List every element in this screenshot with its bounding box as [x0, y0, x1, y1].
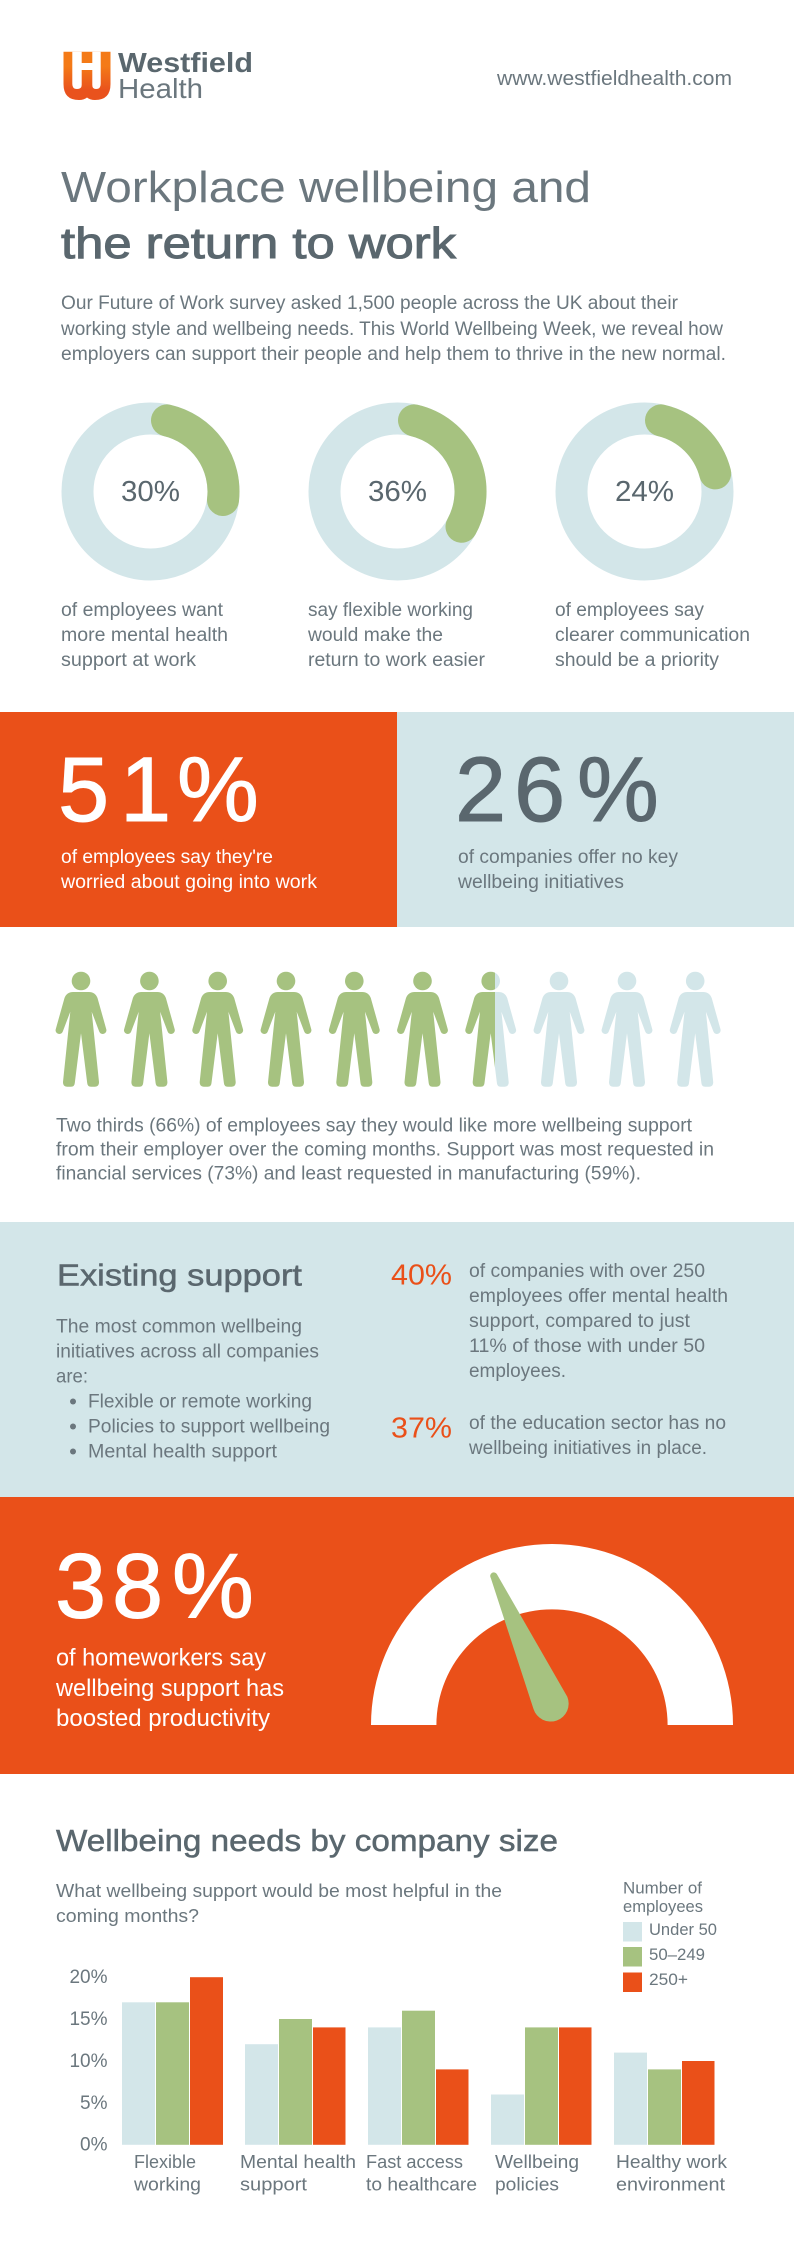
value 36%: 36%: [368, 476, 427, 508]
caption: support at work: [61, 650, 197, 671]
category labels: Mental health: [240, 2151, 356, 2172]
caption: return to work easier: [308, 650, 486, 671]
paragraph: two thirds: financial services (73%) and least requested in manufacturing (59%).: [56, 1164, 641, 1184]
logo: Westfield Health: [64, 47, 253, 104]
intro paragraph: Our Future of Work survey asked 1,500 people across the UK about their: [61, 293, 679, 314]
caption: of companies offer no key: [458, 847, 678, 868]
legend: 50–249: [649, 1946, 705, 1964]
panel: existing support: [0, 1222, 794, 1497]
donut stat: 36%: [307, 418, 486, 671]
y axis labels: 15%: [69, 2009, 108, 2030]
value 30%: 30%: [121, 476, 180, 508]
title: the return to work: [61, 219, 457, 268]
paragraph: two thirds: Two thirds (66%) of employees say they would like more wellbeing support: [56, 1116, 693, 1136]
pictogram: 66% of ten people: [56, 972, 721, 1087]
category labels: working: [133, 2174, 201, 2194]
caption: clearer communication: [555, 625, 750, 646]
donut chart 30%: [78, 418, 224, 564]
stat 40% text: employees.: [469, 1361, 566, 1382]
donut chart 24%: [572, 418, 718, 564]
caption: [307, 600, 486, 671]
category labels: Wellbeing: [495, 2151, 579, 2172]
legend: 250+: [649, 1971, 688, 1989]
value 24%: 24%: [615, 476, 674, 508]
panel: 26% no initiatives: [397, 712, 794, 927]
icon: Westfield mark: [64, 52, 110, 100]
paragraph: two thirds: [56, 1116, 714, 1184]
website address: www.westfieldhealth.com: [496, 68, 732, 90]
bullet list: Mental health support: [88, 1442, 278, 1462]
chart question: [56, 1880, 502, 1926]
title: Workplace wellbeing and: [61, 163, 591, 212]
y axis labels: 5%: [80, 2093, 108, 2114]
heading: wellbeing needs: Wellbeing needs by company size: [56, 1823, 558, 1858]
caption: [60, 847, 318, 893]
intro text: [56, 1316, 319, 1388]
paragraph: two thirds: from their employer over the coming months. Support was most requested in: [56, 1140, 714, 1160]
value 38%: 38%: [55, 1536, 254, 1638]
category labels: support: [240, 2174, 307, 2194]
legend: Under 50: [649, 1921, 717, 1939]
logo wordmark Westfield: Westfield: [118, 47, 253, 78]
legend: [623, 1880, 717, 1992]
logo wordmark Health: Health: [118, 73, 203, 104]
intro paragraph: employers can support their people and help them to thrive in the new normal.: [61, 344, 726, 365]
caption: [457, 847, 678, 893]
y axis labels: 0%: [80, 2134, 108, 2156]
caption: would make the: [307, 625, 443, 646]
stat 40% text: of companies with over 250: [469, 1261, 705, 1282]
chart question: What wellbeing support would be most helpful in the: [56, 1880, 502, 1901]
bars: mental health support: [245, 2019, 346, 2145]
heading: Existing support: [57, 1258, 302, 1292]
stat 37% text: of the education sector has no: [469, 1413, 726, 1434]
stat 40% text: support, compared to just: [469, 1311, 691, 1332]
value 26%: 26%: [455, 739, 659, 841]
caption: say flexible working: [308, 600, 473, 621]
category labels: Healthy work: [616, 2151, 728, 2172]
caption: [55, 1644, 284, 1732]
caption: of homeworkers say: [56, 1644, 266, 1672]
stat 40% text: [469, 1261, 728, 1382]
donut chart 36%: [324, 418, 471, 564]
intro paragraph: working style and wellbeing needs. This World Wellbeing Week, we reveal how: [60, 319, 723, 340]
caption: boosted productivity: [56, 1705, 270, 1732]
caption: should be a priority: [555, 650, 719, 671]
gauge: [371, 1544, 733, 1725]
chart question: coming months?: [56, 1905, 199, 1926]
bars: flexible working: [122, 1977, 223, 2145]
panel: 38% homeworkers: [0, 1497, 794, 1774]
value 51%: 51%: [58, 739, 259, 841]
legend: employees: [623, 1898, 703, 1916]
category labels: [133, 2151, 728, 2194]
stat 40% text: 11% of those with under 50: [469, 1336, 705, 1357]
bullet list: Policies to support wellbeing: [88, 1416, 330, 1438]
stat 40% text: employees offer mental health: [469, 1286, 728, 1307]
intro text: The most common wellbeing: [56, 1316, 302, 1338]
caption: of employees say they're: [61, 847, 273, 868]
panel: 51% worried: [0, 712, 397, 927]
donut stat: 30%: [61, 418, 228, 671]
legend: Number of: [623, 1880, 702, 1898]
bars: healthy work environment: [614, 2053, 714, 2145]
caption: of employees say: [555, 600, 704, 621]
gauge needle: [490, 1572, 569, 1722]
y axis labels: [69, 1967, 108, 2156]
caption: [61, 600, 228, 671]
caption: wellbeing support has: [55, 1675, 284, 1702]
y axis labels: 20%: [69, 1967, 108, 1988]
header: logo and website: [64, 47, 732, 104]
caption: of employees want: [61, 600, 224, 621]
category labels: policies: [495, 2174, 559, 2194]
caption: worried about going into work: [60, 872, 318, 893]
bullet list: [70, 1392, 330, 1462]
category labels: to healthcare: [366, 2174, 477, 2194]
stat 37%: 37%: [391, 1412, 452, 1444]
category labels: Fast access: [366, 2151, 463, 2172]
bar chart: [69, 1967, 728, 2194]
caption: more mental health: [61, 625, 228, 646]
intro paragraph: [60, 293, 726, 365]
category labels: Flexible: [134, 2151, 196, 2172]
intro text: are:: [56, 1366, 88, 1388]
stat 37% text: wellbeing initiatives in place.: [468, 1438, 707, 1459]
bars: fast access to healthcare: [368, 2011, 468, 2145]
bullet list: Flexible or remote working: [88, 1392, 312, 1412]
y axis labels: 10%: [69, 2051, 108, 2072]
intro text: initiatives across all companies: [56, 1342, 319, 1362]
caption: wellbeing initiatives: [457, 872, 624, 893]
stat 37% text: [468, 1413, 726, 1459]
category labels: environment: [616, 2174, 725, 2194]
caption: [555, 600, 750, 671]
title: [61, 163, 591, 268]
stat 40%: 40%: [391, 1260, 452, 1292]
bars: wellbeing policies: [491, 2027, 592, 2145]
donut stat: 24%: [555, 418, 750, 671]
